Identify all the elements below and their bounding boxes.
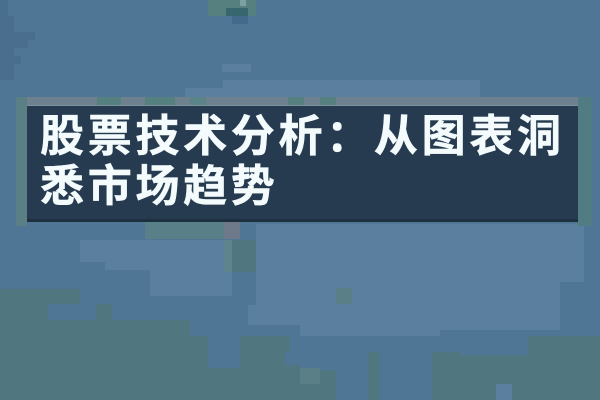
title line 1: 股票技术分析：从图表洞 xyxy=(40,112,565,161)
title line 2: 悉市场趋势 xyxy=(40,162,278,211)
title panel xyxy=(27,105,578,222)
top centre object xyxy=(208,0,256,24)
